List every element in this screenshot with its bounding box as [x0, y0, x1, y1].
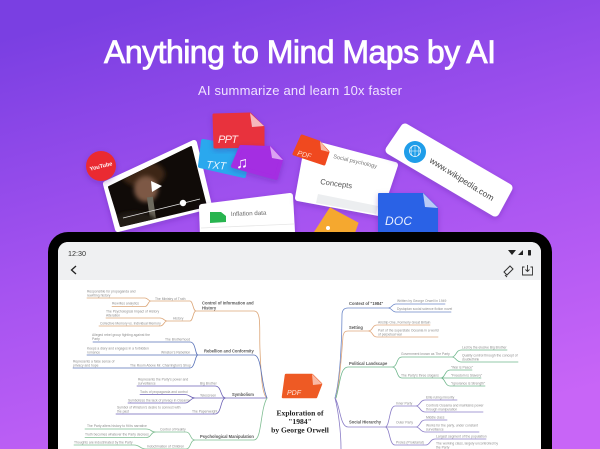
icon: YouTube badge: [86, 151, 116, 181]
branch: Rebellion and Conformity: Rebellion and Conformity: [204, 348, 255, 354]
branch: Control of Information and History: Collective Memory vs. Individual Memory: [100, 322, 161, 326]
branch: Rebellion and Conformity: Party: [92, 337, 100, 341]
card: social psychology: Concepts: [320, 177, 353, 190]
branch: Political Landscape: "Freedom is Slavery": [451, 374, 483, 378]
progress slider: [123, 199, 200, 218]
branch: Political Landscape: Political Landscape: [349, 361, 388, 366]
card: website link: www.wikipedia.com: [427, 155, 496, 203]
branch: Social Hierarchy: Middle class: [426, 416, 445, 420]
branch: Context of 1984: Dystopian social science fiction novel: [397, 307, 452, 311]
branch: Setting: Part of the superstate Oceania in a world: [378, 328, 439, 332]
branch: Symbolism: The Paperweight: [192, 410, 217, 414]
file icon: TXT: [200, 141, 249, 176]
branch: Setting: Setting: [349, 325, 363, 330]
branch: Social Hierarchy: Elite ruling minority: [426, 396, 455, 400]
branch: Symbolism: surveillance: [138, 382, 156, 386]
branch: Psychological Manipulation: Truth becomes whatever the Party decrees: [85, 432, 149, 436]
branch: Setting: of perpetual war: [378, 332, 403, 336]
file icon: PPT: PPT: [218, 134, 239, 146]
branch: Symbolism: Symbolism: [232, 392, 254, 397]
branch: Rebellion and Conformity: Winston's Rebellion: [161, 350, 190, 354]
branch: Control of Information and History: Alteration: [106, 314, 120, 318]
branch: Symbolism: Symbol of Winston's desire to connect with: [117, 406, 181, 410]
branch: Control of Information and History: [87, 290, 267, 398]
tablet frame: [48, 232, 552, 449]
central node: PDF icon: PDF: [287, 390, 302, 397]
branch: Social Hierarchy: Works for the party, under constant: [426, 424, 478, 428]
mind map: [73, 290, 518, 449]
file icon: DOC: DOC: [385, 214, 412, 228]
file icon: PDF: [294, 136, 329, 164]
branch: Rebellion and Conformity: Represents a false sense of: [73, 360, 115, 364]
branch: Psychological Manipulation: The Party alters history to fit its narrative: [87, 424, 147, 428]
branch: Rebellion and Conformity: Alleged rebel group fighting against the: [92, 333, 150, 337]
branch: Social Hierarchy: Inner Party: [396, 402, 413, 406]
card: inflation data: Inflation data: [231, 210, 267, 218]
branch: Political Landscape: Led by the elusive Big Brother: [462, 346, 507, 350]
branch: Context of 1984: Written by George Orwell in 1949: [397, 299, 447, 303]
status bar time: 12:30: [68, 249, 86, 258]
branch: Rebellion and Conformity: The Brotherhood: [165, 338, 190, 342]
central node: title: "1984": [288, 417, 312, 426]
branch: Political Landscape: "War is Peace": [451, 366, 474, 370]
branch: Symbolism: Symbolizes the lack of privacy in Oceania: [128, 398, 190, 402]
card: social psychology: [298, 142, 395, 214]
branch: Symbolism: the past: [117, 410, 129, 414]
branch: Social Hierarchy: Controls Oceania and maintains power: [426, 404, 485, 408]
floating source cards: [86, 113, 508, 240]
branch: Social Hierarchy: through manipulation: [426, 408, 457, 412]
file icon: PPT: [214, 113, 264, 147]
status icons: [508, 250, 531, 256]
central node: PDF icon: [283, 374, 322, 397]
central node: title: by George Orwell: [271, 426, 329, 434]
branch: Political Landscape: "Ignorance is Strength": [451, 382, 486, 386]
branch: Context of 1984: [335, 299, 452, 398]
title: Anything to Mind Maps by AI: [104, 34, 496, 70]
file icon: TXT: TXT: [206, 159, 228, 173]
branch: Rebellion and Conformity: privacy and hope: [73, 364, 99, 368]
icon: save: [522, 265, 532, 275]
branch: Rebellion and Conformity: The Room Above Mr. Charrington's Shop: [130, 364, 191, 368]
file icon: music: ♫: [236, 155, 248, 172]
branch: Context of 1984: Context of "1984": [349, 301, 383, 306]
file icon: DOC: [379, 193, 438, 240]
file icon: music: [233, 146, 283, 178]
file icon: image: [314, 208, 358, 232]
branch: Social Hierarchy: Largest segment of the population: [436, 434, 487, 438]
branch: Political Landscape: [336, 346, 518, 398]
branch: Setting: Airstrip One, Formerly Great Britain: [378, 320, 431, 324]
branch: Control of Information and History: The Ministry of Truth: [155, 297, 186, 301]
icon: back chevron: [72, 266, 76, 274]
branch: Symbolism: Represents the Party's power and: [138, 378, 188, 382]
branch: Psychological Manipulation: Thoughts are indoctrinated by the Party: [74, 440, 133, 444]
branch: Social Hierarchy: Social Hierarchy: [349, 420, 382, 424]
branch: Control of Information and History: Rewrites analytics: [112, 302, 139, 306]
branch: Control of Information and History: History: [173, 316, 184, 320]
card: website link: [390, 128, 508, 212]
branch: Social Hierarchy: surveillance: [426, 428, 444, 432]
branch: Political Landscape: Government known as The Party: [401, 352, 450, 356]
branch: Social Hierarchy: Proles (Proletariat): [396, 440, 424, 444]
file icon: PDF: PDF: [296, 150, 313, 161]
branch: Symbolism: Big Brother: [200, 382, 218, 386]
icon: YouTube badge: YouTube: [89, 161, 113, 173]
branch: Political Landscape: doublethink: [462, 358, 479, 362]
card: social psychology: Social psychology: [333, 154, 378, 170]
branch: Control of Information and History: Control of Information and: [202, 300, 254, 306]
branch: Symbolism: Telescreen: [200, 394, 216, 398]
branch: Psychological Manipulation: Indoctrination of Children: [147, 444, 184, 448]
card: video player: [106, 143, 209, 232]
branch: Control of Information and History: History: [202, 306, 217, 310]
branch: Social Hierarchy: Outer Party: [396, 420, 413, 424]
branch: Psychological Manipulation: Psychological Manipulation: [200, 434, 254, 439]
icon: globe: [404, 141, 426, 163]
card: inflation data: [201, 196, 294, 236]
central node: title: Exploration of: [276, 408, 324, 418]
subtitle: AI summarize and learn 10x faster: [198, 83, 403, 98]
branch: Symbolism: Tools of propaganda and control: [140, 390, 188, 394]
branch: Control of Information and History: The Psychological Impact of History: [106, 310, 159, 314]
branch: Rebellion and Conformity: [73, 333, 267, 398]
branch: Symbolism: [116, 378, 267, 414]
branch: Political Landscape: Quality control through the concept of: [462, 354, 518, 358]
branch: Control of Information and History: rewriting history: [87, 294, 111, 298]
app header: [58, 242, 541, 280]
branch: Setting: [336, 320, 439, 398]
branch: Psychological Manipulation: [74, 398, 267, 449]
branch: Rebellion and Conformity: romance: [87, 350, 100, 354]
branch: Rebellion and Conformity: Keeps a diary and engages in a forbidden: [87, 346, 149, 350]
icon: brush: [504, 266, 513, 277]
branch: Social Hierarchy: The working class, largely uncontrolled by: [436, 442, 498, 446]
branch: Control of Information and History: Responsible for propaganda and: [87, 290, 136, 294]
tablet screen: [58, 242, 541, 449]
icon: play button: [151, 181, 162, 192]
branch: Social Hierarchy: [335, 396, 498, 449]
branch: Psychological Manipulation: Control of Reality: [160, 428, 186, 432]
branch: Political Landscape: The Party's three slogans: [401, 374, 439, 378]
